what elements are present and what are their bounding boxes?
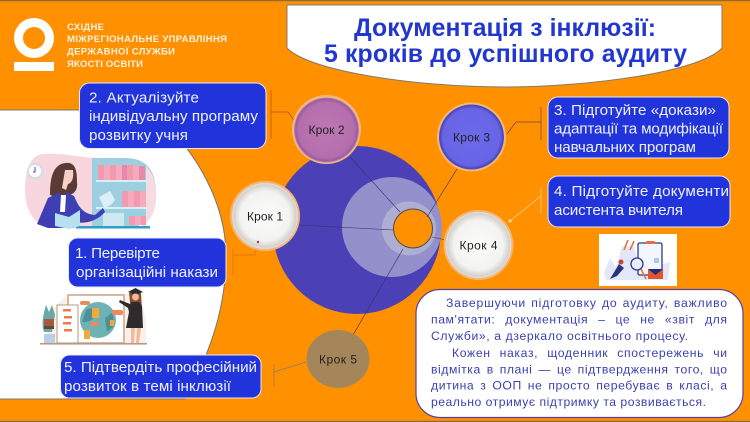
organization name: ДЕРЖАВНОЇ СЛУЖБИ: [67, 46, 175, 58]
step 2 box: розвитку учня: [89, 127, 188, 144]
step 1 circle: [230, 181, 300, 251]
step 5 circle: Крок 5: [319, 352, 357, 366]
conclusion panel: Кожен наказ, щоденник спостережень чи: [452, 346, 727, 360]
logo: [14, 22, 54, 71]
step 3 circle: Крок 3: [453, 130, 490, 144]
center hole: [394, 209, 432, 248]
step 4 circle: [444, 210, 514, 280]
step 2 box: 2. Актуалізуйте: [89, 90, 199, 106]
step 4 box: 4. Підготуйте документи: [554, 183, 729, 200]
organization name: СХІДНЕ: [67, 22, 104, 33]
step 4 box: асистента вчителя: [554, 202, 683, 219]
conclusion panel: Завершуючи підготовку до аудиту, важливо: [446, 296, 727, 310]
title banner: [287, 5, 722, 87]
illustration: woman with documents: [25, 154, 156, 229]
step 2 circle: Крок 2: [308, 123, 345, 137]
step 1 box: [68, 238, 226, 287]
step 4 circle: Крок 4: [460, 238, 498, 252]
connector: step 1: [233, 242, 258, 275]
step 5 box: розвиток в темі інклюзії: [64, 378, 232, 395]
step 3 box: навчальних програм: [554, 139, 696, 156]
illustration: audit checklist: [599, 234, 677, 286]
conclusion panel: пам'ятати: документація – це не «звіт для: [431, 312, 727, 326]
organization name: ЯКОСТІ ОСВІТИ: [67, 59, 143, 70]
connector: step 2: [271, 90, 298, 139]
organization name: МІЖРЕГІОНАЛЬНЕ УПРАВЛІННЯ: [67, 34, 227, 45]
step 3 box: 3. Підготуйте «докази»: [554, 102, 716, 119]
step 5 box: [60, 355, 261, 398]
conclusion panel: [416, 290, 743, 418]
step 1 circle: Крок 1: [247, 210, 283, 224]
illustration: teacher with globe: [40, 288, 147, 345]
spokes: [299, 157, 457, 335]
step 3 box: [548, 97, 729, 158]
step 2 box: індивідуальну програму: [89, 108, 258, 125]
connector: step 4: [510, 188, 541, 221]
connector: step 5: [274, 362, 306, 387]
title: 5 кроків до успішного аудиту: [324, 41, 687, 68]
organization name: [67, 22, 227, 70]
step 3 circle: [437, 102, 506, 172]
connector: step 3: [507, 107, 541, 140]
step 3 box: адаптації та модифікації: [554, 120, 724, 138]
conclusion panel: дитина з ООП не просто перебуває в класі, а: [431, 378, 727, 392]
step 1 box: організаційні накази: [76, 264, 218, 281]
step 2 circle: [292, 95, 361, 164]
conclusion panel: Служби», а дзеркало освітнього процесу.: [431, 329, 688, 343]
title: Документація з інклюзії:: [354, 15, 656, 42]
large purple circle: [273, 146, 441, 314]
white left panel: [0, 110, 226, 399]
ring: [382, 202, 436, 256]
step 1 box: 1. Перевірте: [75, 245, 160, 262]
conclusion panel: реально отримує підтримку та розвивається.: [431, 395, 706, 409]
conclusion panel: відмітка в плані — це підтвердження того, що: [431, 362, 727, 376]
step 5 box: 5. Підтвердіть професійний: [64, 359, 257, 376]
step 4 box: [548, 176, 730, 227]
step 2 box: [80, 83, 266, 148]
title: [324, 15, 687, 68]
light circle: [342, 177, 442, 277]
step 5 circle: [306, 330, 370, 388]
